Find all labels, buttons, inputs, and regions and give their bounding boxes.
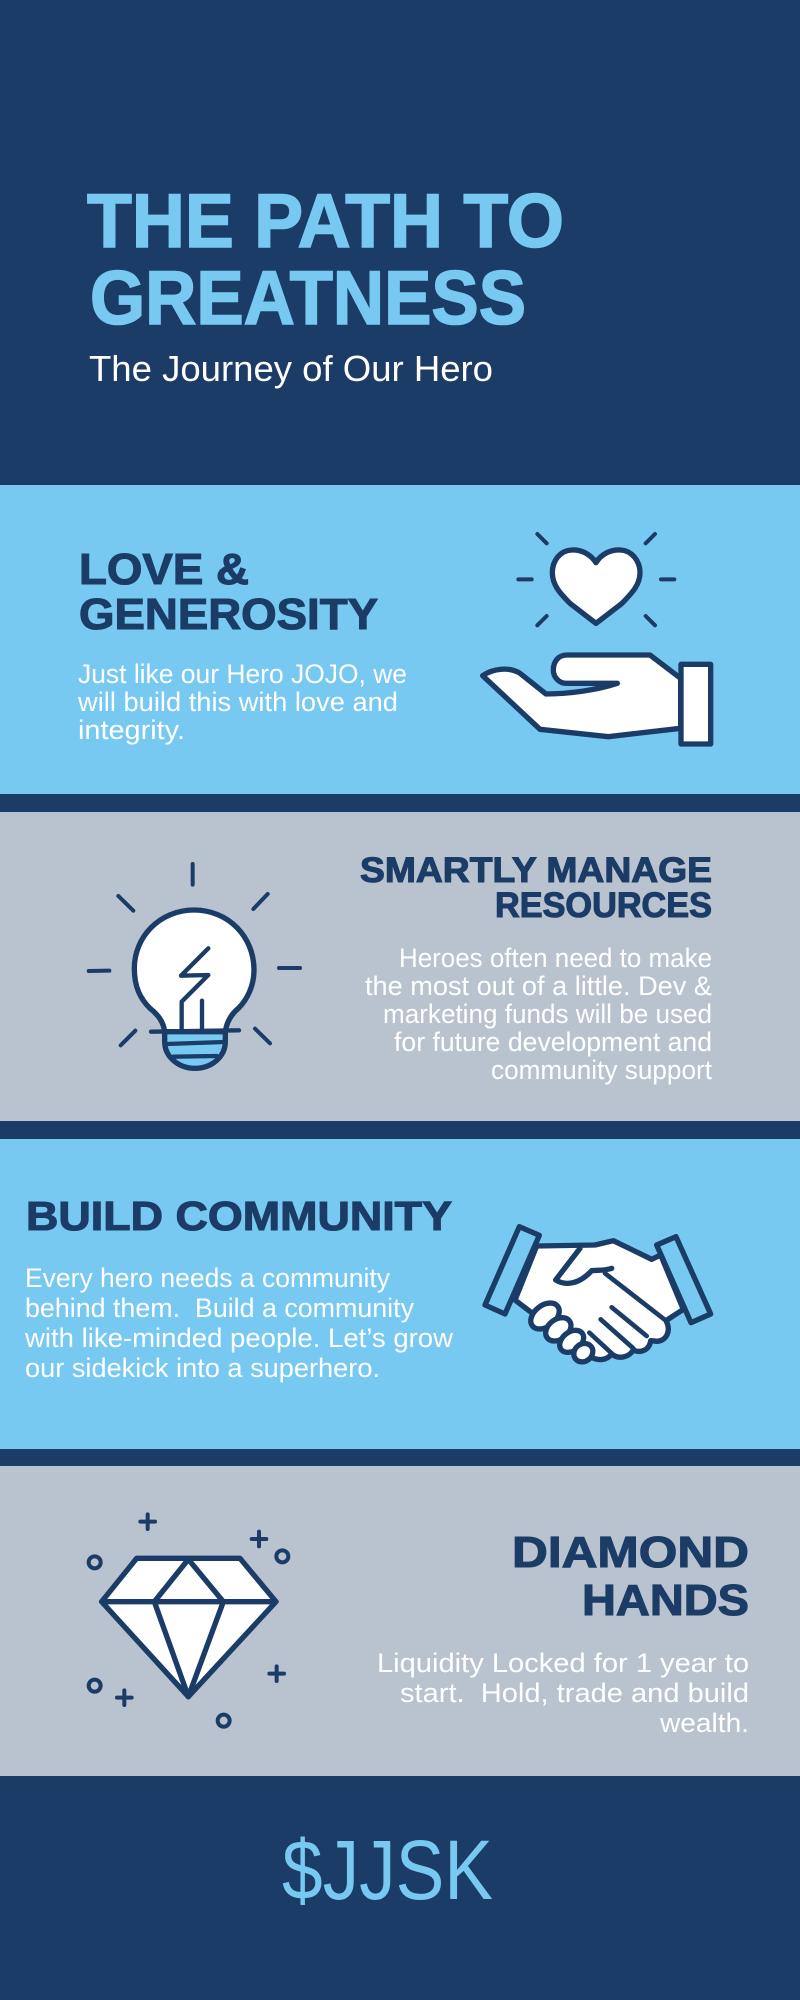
- title: GREATNESS: [90, 256, 526, 341]
- panel: love and generosity: [0, 485, 800, 794]
- icon: handshake: [485, 1227, 711, 1366]
- panel: smartly manage resources: [0, 812, 800, 1121]
- text: diamond hands body: [377, 1648, 749, 1738]
- text: build community body: behind them. Build a community: [25, 1293, 414, 1323]
- text: smartly manage body: Heroes often need to make: [399, 943, 712, 973]
- heading: love and generosity: GENEROSITY: [79, 590, 378, 639]
- text: build community body: our sidekick into a superhero.: [25, 1353, 380, 1383]
- text: smartly manage body: for future development and: [394, 1027, 712, 1057]
- text: love and generosity body: will build this with love and: [77, 687, 398, 717]
- heading: smartly manage resources: SMARTLY MANAGE: [360, 851, 712, 890]
- heading: love and generosity: LOVE &: [79, 545, 249, 594]
- text: build community body: with like-minded people. Let’s grow: [24, 1323, 454, 1353]
- panel: build community: [0, 1139, 800, 1449]
- text: build community body: Every hero needs a community: [25, 1263, 390, 1293]
- title: [87, 179, 564, 341]
- icon: light bulb: [89, 864, 300, 1068]
- text: love and generosity body: [77, 659, 407, 745]
- text: build community body: [24, 1263, 454, 1383]
- icon: heart in open hand: [483, 534, 711, 744]
- panel: diamond hands: [0, 1466, 800, 1776]
- subtitle: The Journey of Our Hero: [89, 348, 493, 389]
- icon: diamond: [89, 1514, 288, 1727]
- title: THE PATH TO: [87, 179, 564, 264]
- heading: love and generosity: [79, 545, 378, 639]
- heading: build community: BUILD COMMUNITY: [26, 1193, 452, 1239]
- heading: diamond hands: HANDS: [582, 1576, 749, 1625]
- text: smartly manage body: marketing funds will be used: [383, 999, 712, 1029]
- heading: diamond hands: DIAMOND: [512, 1528, 749, 1577]
- heading: smartly manage resources: RESOURCES: [495, 886, 712, 925]
- text: love and generosity body: integrity.: [78, 715, 185, 745]
- header: title block: [87, 179, 564, 389]
- text: smartly manage body: [365, 943, 712, 1085]
- text: diamond hands body: wealth.: [659, 1708, 749, 1738]
- heading: diamond hands: [512, 1528, 749, 1625]
- text: diamond hands body: start. Hold, trade and build: [400, 1678, 749, 1708]
- heading: smartly manage resources: [360, 851, 712, 925]
- footer token label: $JJSK: [282, 1823, 493, 1917]
- text: love and generosity body: Just like our Hero JOJO, we: [78, 659, 407, 689]
- text: diamond hands body: Liquidity Locked for 1 year to: [377, 1648, 749, 1678]
- text: smartly manage body: the most out of a little. Dev &: [365, 971, 712, 1001]
- text: smartly manage body: community support: [491, 1055, 712, 1085]
